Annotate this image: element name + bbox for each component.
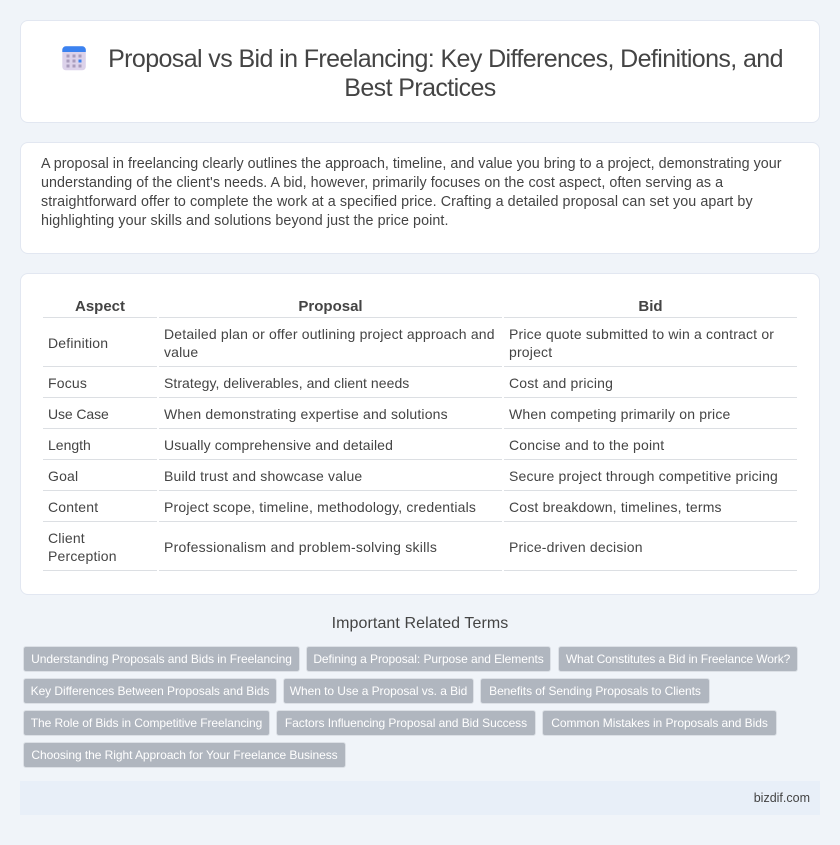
table rows: Cost and pricing	[509, 375, 613, 391]
related term tags: Factors Influencing Proposal and Bid Success	[285, 716, 527, 730]
table rows: project	[509, 344, 552, 360]
table rows: Use Case	[48, 406, 109, 422]
table rows: Usually comprehensive and detailed	[164, 437, 393, 453]
related term tags: The Role of Bids in Competitive Freelancing	[31, 716, 262, 730]
intro text: understanding of the client's needs. A bid, however, primarily focuses on the cost aspect, often serving as a	[41, 175, 723, 191]
table rows: Build trust and showcase value	[164, 468, 362, 484]
table rows: Professionalism and problem-solving skills	[164, 539, 437, 555]
table rows: Concise and to the point	[509, 437, 664, 453]
table rows: Price-driven decision	[509, 539, 643, 555]
related term tags: Benefits of Sending Proposals to Clients	[489, 684, 701, 698]
table rows: Strategy, deliverables, and client needs	[164, 375, 409, 391]
related term tags: Defining a Proposal: Purpose and Elements	[313, 652, 544, 666]
panel: comparison table	[20, 273, 820, 595]
table rows: Focus	[48, 375, 87, 391]
title: Best Practices	[344, 74, 496, 102]
related term tags: When to Use a Proposal vs. a Bid	[290, 684, 467, 698]
table rows: Client	[48, 530, 85, 546]
table rows: Detailed plan or offer outlining project approach and	[164, 326, 495, 342]
table rows: Content	[48, 499, 98, 515]
table header: aspect: Aspect	[75, 298, 125, 315]
table rows: Perception	[48, 548, 117, 564]
title: Proposal vs Bid in Freelancing: Key Differences, Definitions, and	[108, 45, 783, 73]
table rows: Length	[48, 437, 91, 453]
table rows: Project scope, timeline, methodology, credentials	[164, 499, 476, 515]
related term tags	[23, 646, 798, 768]
table rows: When demonstrating expertise and solutions	[164, 406, 448, 422]
table rows: Price quote submitted to win a contract or	[509, 326, 774, 342]
intro text	[41, 156, 782, 229]
related term tags: Common Mistakes in Proposals and Bids	[551, 716, 768, 730]
intro text: straightforward offer to complete the work at a specified price. Crafting a detailed proposal can set you apart by	[41, 194, 753, 210]
intro text: A proposal in freelancing clearly outlines the approach, timeline, and value you bring to a project, demonstrating your	[41, 156, 782, 172]
table rows: value	[164, 344, 198, 360]
related term tags: Choosing the Right Approach for Your Freelance Business	[31, 748, 338, 762]
panel: intro	[20, 142, 820, 254]
footer bar	[20, 781, 820, 815]
table rows: Definition	[48, 335, 108, 351]
table rows: When competing primarily on price	[509, 406, 730, 422]
table header: proposal: Proposal	[298, 298, 363, 315]
icon: calendar	[62, 46, 86, 70]
related term tags: What Constitutes a Bid in Freelance Work?	[566, 652, 790, 666]
table rows: Cost breakdown, timelines, terms	[509, 499, 722, 515]
table header: bid: Bid	[638, 298, 663, 315]
table rows: Secure project through competitive pricing	[509, 468, 778, 484]
header panel	[20, 20, 820, 123]
related term tags: Key Differences Between Proposals and Bids	[31, 684, 269, 698]
intro text: highlighting your skills and solutions beyond just the price point.	[41, 213, 449, 229]
related term tags: Understanding Proposals and Bids in Freelancing	[31, 652, 292, 666]
table rows	[43, 317, 797, 571]
table rows: Goal	[48, 468, 78, 484]
footer source: bizdif.com	[754, 791, 810, 805]
related terms heading: Important Related Terms	[332, 615, 508, 632]
title	[108, 45, 783, 102]
